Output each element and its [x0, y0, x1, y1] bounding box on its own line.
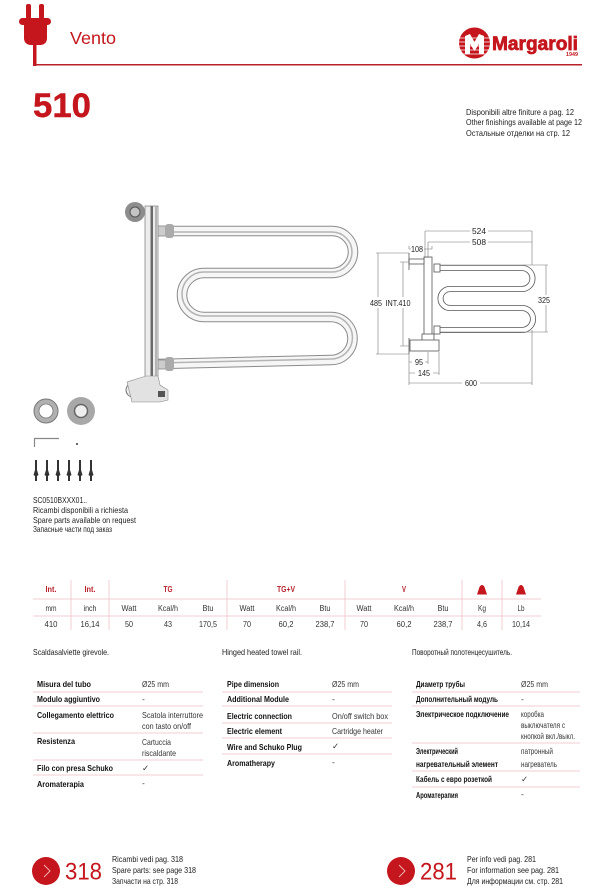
table units row: Kg — [478, 604, 486, 613]
spare parts text: Spare parts available on request — [33, 515, 137, 525]
features panel: Italian: Misura del tubo — [37, 679, 91, 689]
features panel: Italian: Aromaterapia — [37, 779, 84, 789]
table header row: TG — [164, 585, 172, 594]
spare parts text: SC0510BXXX01.. — [33, 495, 87, 505]
finishes note: Disponibili altre finiture a pag. 12 — [466, 107, 574, 117]
features panel: Russian: Дополнительный модуль — [416, 694, 498, 704]
features panel: Russian: Ø25 mm — [521, 679, 548, 689]
features panel: English: - — [332, 694, 335, 704]
product description: Russian: Поворотный полотенцесушитель. — [412, 647, 512, 657]
features panel: Italian: riscaldante — [142, 748, 176, 758]
icon: red plug — [19, 4, 51, 66]
table header row: Int. — [46, 585, 56, 594]
features panel: Italian: Ø25 mm — [142, 679, 169, 689]
table values row: 16,14 — [80, 620, 100, 629]
features panel: Italian: ✓ — [142, 764, 149, 774]
footer reference: spare parts page 318: Запчасти на стр. 318 — [112, 876, 178, 886]
table units row: inch — [84, 604, 96, 613]
footer reference: information page 281: For information see pag. 281 — [467, 865, 559, 875]
table values row: 10,14 — [512, 620, 530, 629]
table units row: Watt — [356, 604, 372, 613]
features panel: Russian: нагреватель — [521, 759, 557, 769]
features panel: Italian: Resistenza — [37, 736, 75, 746]
logo: Margaroli: 1949 — [566, 52, 578, 58]
finishes note — [466, 107, 582, 138]
features panel: Italian: Filo con presa Schuko — [37, 763, 113, 773]
logo: Margaroli: Margaroli — [492, 34, 578, 55]
technical drawing with dimensions: 108 — [411, 244, 423, 254]
footer reference: information page 281: Для информации см. стр. 281 — [467, 876, 563, 886]
table units row: Watt — [240, 604, 255, 613]
product description: Italian: Scaldasalviette girevole. — [33, 647, 109, 657]
model number 510: 510 — [33, 87, 91, 125]
product photo: chrome towel rail — [125, 202, 353, 402]
technical drawing with dimensions: 508 — [472, 237, 486, 247]
table values row: 60,2 — [278, 620, 294, 629]
features panel: Russian: коробка — [521, 709, 544, 719]
table values row: 70 — [360, 620, 368, 629]
technical drawing with dimensions: 95 — [415, 357, 423, 367]
features panel: Russian: Электрическое подключение — [416, 709, 509, 719]
table units row: Kcal/h — [158, 604, 178, 613]
features panel: Russian — [412, 679, 580, 800]
features panel: Italian: Cartuccia — [142, 737, 171, 747]
table header row: TG+V — [277, 585, 296, 594]
spare parts illustration — [34, 397, 95, 481]
table units row: Lb — [518, 604, 525, 613]
features panel: Russian: - — [521, 694, 524, 704]
features panel: Italian: Collegamento elettrico — [37, 710, 114, 720]
table values row: 238,7 — [316, 620, 335, 629]
features panel: Russian: кнопкой вкл./выкл. — [521, 731, 575, 741]
table values row: 50 — [125, 620, 133, 629]
technical drawing with dimensions: 524 — [472, 226, 486, 236]
footer reference: spare parts page 318: 318 — [65, 858, 102, 886]
features panel: Italian: - — [142, 694, 145, 704]
table header row — [46, 585, 526, 594]
technical drawing with dimensions: 600 — [465, 378, 477, 388]
features panel: English: On/off switch box — [332, 711, 389, 721]
features panel: Russian: ✓ — [521, 775, 528, 785]
footer reference: information page 281 — [387, 854, 563, 886]
table values row: 410 — [44, 620, 58, 629]
table units row: Kcal/h — [394, 604, 414, 613]
features panel: English: Pipe dimension — [227, 679, 279, 689]
table units row: mm — [46, 604, 57, 613]
features panel: English: Electric element — [227, 726, 282, 736]
technical drawing with dimensions — [370, 226, 552, 388]
technical drawing with dimensions: INT.410 — [386, 298, 411, 308]
table header row: V — [402, 585, 406, 594]
finishes note: Остальные отделки на стр. 12 — [466, 128, 570, 138]
features panel: English: Additional Module — [227, 694, 289, 704]
features panel: Russian: Кабель с евро розеткой — [416, 774, 492, 784]
footer reference: information page 281: Per info vedi pag. 281 — [467, 854, 536, 864]
table values row: 238,7 — [434, 620, 453, 629]
spare parts text: Ricambi disponibili a richiesta — [33, 505, 128, 515]
features panel: Italian: - — [142, 778, 145, 788]
table units row: Btu — [202, 604, 214, 613]
features panel: English: - — [332, 757, 335, 767]
features panel: English: Cartridge heater — [332, 726, 383, 736]
features panel: Italian: Modulo aggiuntivo — [37, 694, 100, 704]
table header row: Int. — [84, 585, 96, 594]
table values row: 43 — [164, 620, 172, 629]
finishes note: Other finishings available at page 12 — [466, 117, 582, 127]
table units row — [46, 604, 525, 613]
table values row: 4,6 — [477, 620, 487, 629]
table values row: 170,5 — [199, 620, 217, 629]
table values row: 70 — [243, 620, 251, 629]
footer reference: spare parts page 318: Ricambi vedi pag. 318 — [112, 854, 183, 864]
features panel: Russian: Диаметр трубы — [416, 679, 465, 689]
features panel: Russian: нагревательный элемент — [416, 759, 498, 769]
header rule — [33, 64, 582, 66]
features panel: English: ✓ — [332, 742, 339, 752]
features panel: English: Wire and Schuko Plug — [227, 742, 302, 752]
features panel: English: Electric connection — [227, 711, 292, 721]
features panel: English: Aromatherapy — [227, 758, 275, 768]
features panel: Italian: Scatola interruttore — [142, 710, 203, 720]
features panel: Russian: - — [521, 789, 524, 799]
features panel: English — [222, 679, 392, 768]
footer reference: spare parts page 318: Spare parts: see page 318 — [112, 865, 196, 875]
features panel: Russian: Электрический — [416, 746, 458, 756]
product description: English: Hinged heated towel rail. — [222, 647, 302, 657]
spare parts text: Запасные части под заказ — [33, 524, 112, 534]
footer reference: information page 281: 281 — [420, 858, 457, 886]
table units row: Btu — [438, 604, 448, 613]
features panel: Russian: Ароматерапия — [416, 790, 458, 800]
footer reference: spare parts page 318 — [32, 854, 196, 886]
logo: Margaroli — [459, 28, 578, 58]
table units row: Btu — [320, 604, 330, 613]
table values row — [44, 620, 530, 629]
technical drawing with dimensions: 485 — [370, 298, 382, 308]
features panel: Italian — [33, 679, 203, 789]
specifications table — [33, 580, 541, 630]
features panel: Italian: con tasto on/off — [142, 721, 192, 731]
technical drawing with dimensions: 325 — [538, 295, 550, 305]
technical drawing with dimensions: 145 — [418, 368, 430, 378]
features panel: Russian: выключателя с — [521, 720, 566, 730]
table values row: 60,2 — [396, 620, 412, 629]
spare parts text — [33, 495, 137, 534]
title: Vento: Vento — [70, 28, 116, 48]
table units row: Watt — [122, 604, 137, 613]
features panel: Russian: патронный — [521, 746, 553, 756]
table units row: Kcal/h — [276, 604, 296, 613]
features panel: English: Ø25 mm — [332, 679, 359, 689]
